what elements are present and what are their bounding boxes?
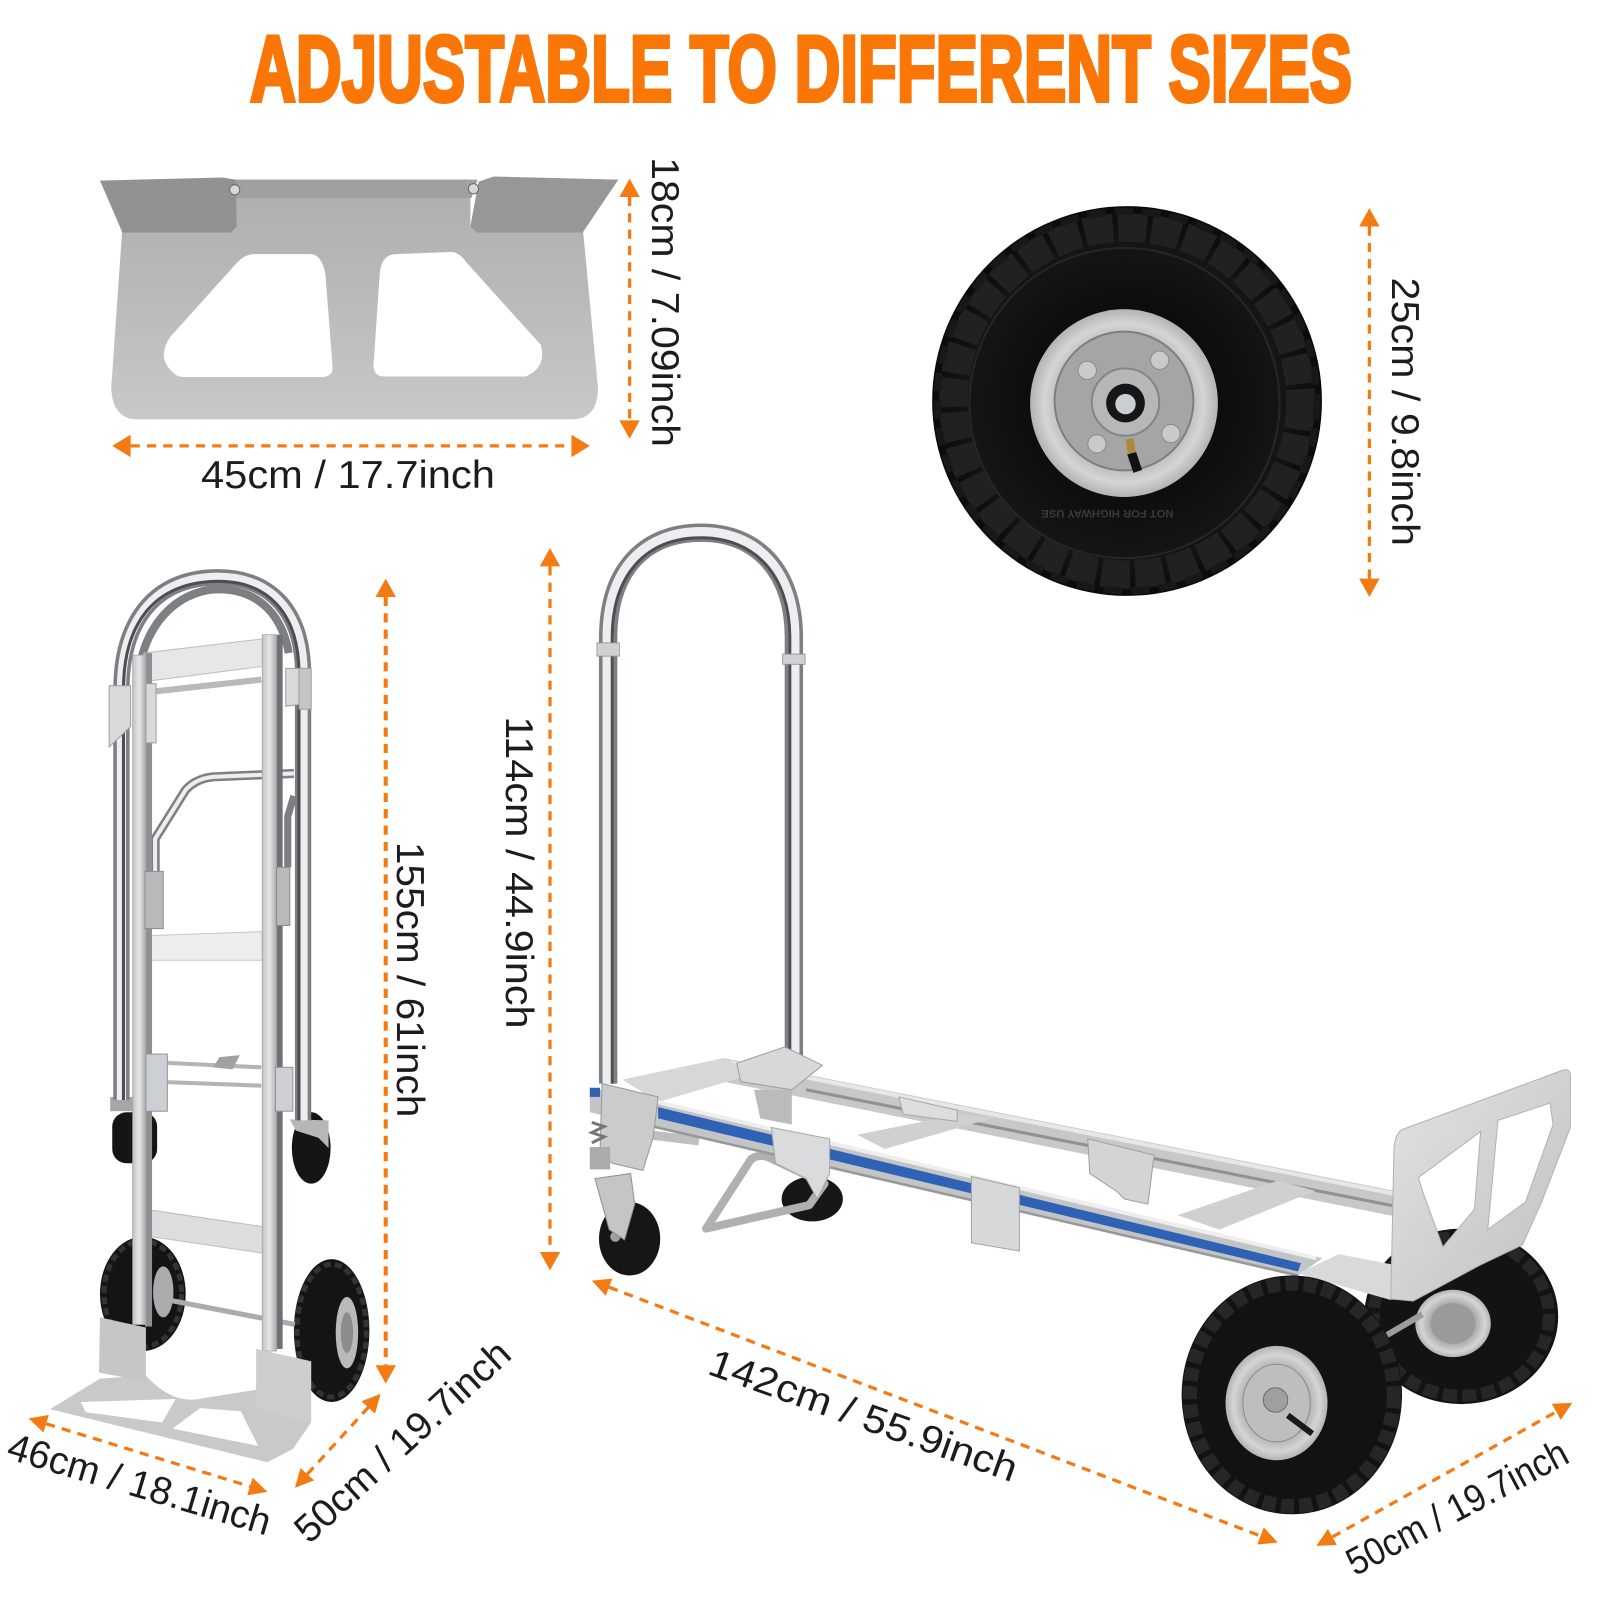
tread blocks <box>954 228 1301 574</box>
valve stem <box>1130 439 1138 471</box>
caster wheel <box>599 1202 660 1276</box>
bracket near 1 <box>771 1128 830 1199</box>
tyre <box>932 206 1322 596</box>
handle socket far <box>737 1047 822 1090</box>
end cross piece <box>622 1058 755 1102</box>
bearing <box>1106 384 1145 422</box>
sidewall lettering: NOT FOR HIGHWAY USE <box>1041 507 1173 519</box>
lower brackets <box>146 1054 293 1111</box>
folding foot handle <box>706 1156 824 1229</box>
base heel left <box>99 1317 146 1382</box>
dimension label: cart length: 142cm / 55.9inch <box>703 1341 1023 1491</box>
rear tube <box>648 1135 699 1141</box>
dimension arrow: handle height <box>540 548 560 1270</box>
far rail <box>723 1058 1395 1216</box>
cross bar top <box>144 639 263 682</box>
plate top band <box>230 180 478 198</box>
cross bar lower <box>145 1209 262 1253</box>
dimension arrow: cart width <box>1312 1395 1577 1554</box>
cross bar middle <box>145 932 262 960</box>
disc <box>1055 332 1193 470</box>
front-right big wheel <box>294 1259 369 1402</box>
sidewall ring <box>969 248 1280 558</box>
panel: large wheel <box>932 206 1322 596</box>
lock pedal <box>213 1055 240 1069</box>
near rail <box>590 1088 1322 1276</box>
panel: platform cart <box>590 533 1570 1514</box>
dimension label: handle height: 114cm / 44.9inch <box>497 716 540 1029</box>
blue channel <box>658 1107 1301 1271</box>
panel: nose plate <box>100 177 618 419</box>
far rail highlight <box>730 1062 1395 1194</box>
dimension arrow: upright height <box>376 579 396 1384</box>
dimension arrow: upright depth <box>288 1388 387 1494</box>
lock rods <box>153 1062 261 1086</box>
bracket far 2 <box>1088 1139 1154 1204</box>
handle tube <box>121 577 303 1120</box>
dimension arrow: cart length <box>589 1272 1281 1551</box>
panel: upright hand truck <box>50 577 369 1462</box>
caster fork <box>595 1173 635 1240</box>
dimension label: base width: 46cm / 18.1inch <box>3 1426 276 1544</box>
bracket far mid <box>899 1097 957 1121</box>
right caster wheel <box>290 1112 331 1184</box>
pivot bracket far <box>754 1090 792 1124</box>
plate body <box>111 180 598 419</box>
dimension label: upright depth: 50cm / 19.7inch <box>286 1332 520 1552</box>
dimension arrow: plate width <box>112 435 590 457</box>
base heel right <box>256 1349 311 1422</box>
rear axle <box>1381 1314 1422 1339</box>
axle <box>1115 394 1136 414</box>
upper brackets <box>109 668 311 747</box>
middle brackets <box>145 867 290 929</box>
left flange <box>100 178 237 233</box>
left caster wheel <box>110 1097 157 1163</box>
dimension label: upright height: 155cm / 61inch <box>388 842 431 1117</box>
right flange <box>470 177 618 233</box>
cross bar 1 <box>857 1114 995 1149</box>
heel upright plate <box>1391 1070 1570 1301</box>
dimension label: plate height: 18cm / 7.09inch <box>643 157 686 447</box>
near rail highlight <box>653 1101 1316 1258</box>
blue channel end <box>590 1088 600 1097</box>
cross tube top <box>151 680 261 692</box>
dimension label: plate width: 45cm / 17.7inch <box>201 454 495 497</box>
rear big wheel <box>1364 1229 1558 1404</box>
heel toe plate <box>1298 1254 1396 1300</box>
right frame rail <box>262 635 283 1351</box>
handle arch <box>597 533 805 1084</box>
left frame rail <box>133 653 152 1327</box>
bracket near 2 <box>971 1177 1019 1251</box>
dimension label: wheel diameter: 25cm / 9.8inch <box>1383 278 1426 546</box>
caster swivel and spring <box>590 1084 658 1170</box>
rear caster wheel <box>782 1177 843 1221</box>
tread outer blocks <box>937 211 1317 591</box>
hub <box>1092 368 1159 436</box>
cross bar 2 <box>1178 1181 1315 1230</box>
base plate <box>50 1376 311 1462</box>
back-left big wheel <box>100 1237 186 1351</box>
front big wheel <box>1182 1276 1402 1514</box>
dimension arrow: base width <box>26 1410 270 1501</box>
near rail lower edge <box>653 1127 1298 1276</box>
bolts <box>1078 351 1180 453</box>
dimension label: cart width: 50cm / 19.7inch <box>1339 1432 1576 1584</box>
dimension arrow: plate height <box>619 179 640 439</box>
rim <box>1030 309 1218 497</box>
folding inner handle <box>155 773 294 873</box>
axle rod <box>168 1300 295 1324</box>
dimension arrow: wheel diameter <box>1359 208 1380 597</box>
far rail shadow <box>806 1090 1395 1206</box>
plate bolts <box>230 184 479 195</box>
